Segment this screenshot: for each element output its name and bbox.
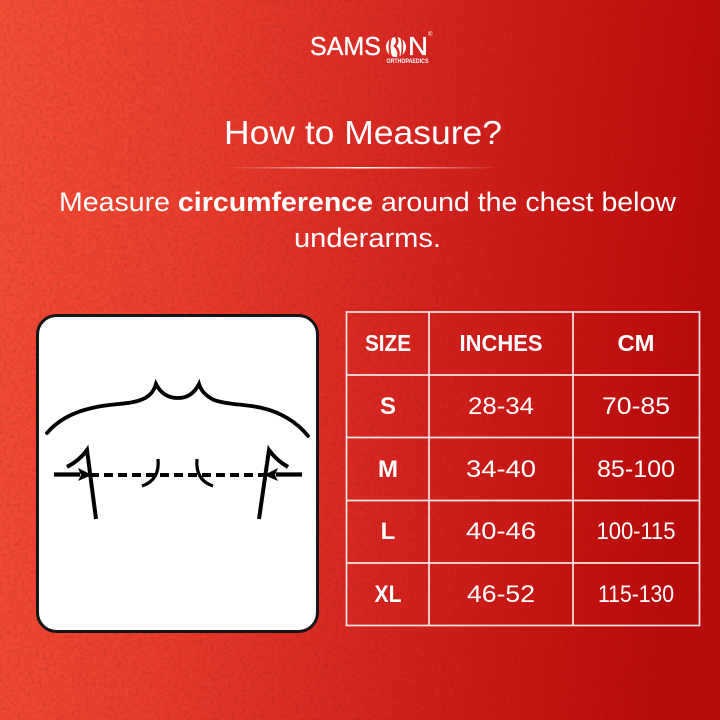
row M: 34-40 <box>466 456 536 483</box>
table header: CM <box>618 330 654 356</box>
instruction text: Measure circumference around the chest below <box>59 187 677 217</box>
divider rule <box>228 167 498 168</box>
logo: Samson Orthopaedics: ORTHOPAEDICS <box>386 59 428 65</box>
table grid <box>346 312 700 626</box>
left arm <box>67 450 96 519</box>
row S: S <box>380 393 396 420</box>
row L: 40-46 <box>466 518 536 545</box>
instruction text <box>59 187 677 253</box>
table header: INCHES <box>460 330 542 356</box>
row L: L <box>381 518 395 545</box>
row XL: 46-52 <box>467 581 535 608</box>
row S: 28-34 <box>468 393 534 420</box>
chest marks <box>142 459 158 486</box>
left arrow <box>54 468 92 481</box>
row L: 100-115 <box>596 518 676 545</box>
row S <box>380 393 670 420</box>
row XL <box>374 581 674 608</box>
logo: Samson Orthopaedics: ® <box>428 31 433 38</box>
row XL: 115-130 <box>598 581 674 608</box>
title: How to Measure? <box>224 114 502 151</box>
dashed measuring line <box>90 473 266 477</box>
row L <box>381 518 676 545</box>
row M <box>378 456 675 483</box>
right arm <box>259 450 288 519</box>
table header <box>365 330 654 356</box>
logo: Samson Orthopaedics: SAMS <box>310 31 381 61</box>
logo: Samson Orthopaedics <box>310 31 433 65</box>
icon: logo joint circle <box>386 36 406 58</box>
instruction text: underarms. <box>294 223 441 253</box>
row XL: XL <box>374 581 402 608</box>
shoulders and neck outline <box>47 384 308 436</box>
row M: M <box>378 456 398 483</box>
table header: SIZE <box>365 330 411 356</box>
right arrow <box>264 468 302 481</box>
logo: Samson Orthopaedics: N <box>408 31 428 61</box>
panel: chest measurement diagram <box>38 316 318 632</box>
row S: 70-85 <box>602 393 670 420</box>
size chart table <box>346 312 700 626</box>
row M: 85-100 <box>597 456 675 483</box>
